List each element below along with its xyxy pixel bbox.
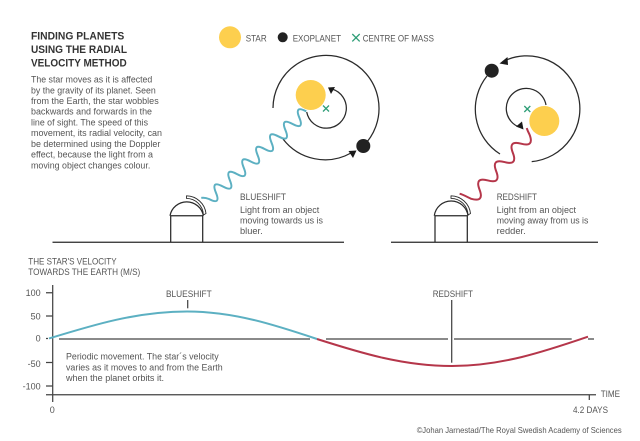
blue light wave — [201, 107, 311, 207]
icon: observatory — [170, 196, 206, 242]
axis title: TOWARDS THE EARTH (M/S) — [28, 267, 140, 277]
redshift caption: Light from an object — [497, 205, 576, 215]
blueshift curve — [49, 312, 317, 339]
legend: STAR — [246, 33, 267, 43]
y axis labels: 100 — [26, 288, 41, 298]
icon: centre of mass — [323, 106, 329, 112]
x axis labels: 0 — [50, 405, 55, 415]
redshift caption: redder. — [497, 226, 526, 236]
axis title — [28, 256, 140, 277]
redshift marker — [433, 289, 473, 363]
title — [31, 30, 127, 69]
redshift caption: moving away from us is — [497, 216, 589, 226]
legend: CENTRE OF MASS — [363, 33, 434, 43]
chart note: Periodic movement. The star´s velocity — [66, 352, 219, 362]
icon: star — [296, 80, 326, 110]
y axis labels: -100 — [23, 382, 41, 392]
outer planet orbit with arrow — [273, 55, 379, 160]
intro text block: movement, its radial velocity, can — [31, 128, 162, 138]
intro text block: by the gravity of its planet. Seen — [31, 85, 156, 95]
intro text block: from the Earth, the star wobbles — [31, 96, 159, 106]
intro text block: backwards and forwards in the — [31, 107, 152, 117]
intro text block: effect, because the light from a — [31, 150, 153, 160]
intro text block: line of sight. The speed of this — [31, 117, 148, 127]
axes — [46, 285, 596, 402]
x axis labels — [50, 389, 620, 415]
outer planet orbit with arrow — [475, 56, 580, 162]
chart note: when the planet orbits it. — [65, 373, 164, 383]
inner star orbit with arrow — [506, 88, 546, 130]
blueshift marker: BLUESHIFT — [166, 289, 212, 299]
icon: exoplanet — [485, 64, 499, 78]
y axis labels: 0 — [36, 334, 41, 344]
chart note — [65, 352, 223, 383]
intro text block: be determined using the Doppler — [31, 139, 160, 149]
blueshift caption: Light from an object — [240, 205, 320, 215]
axis title: THE STAR'S VELOCITY — [28, 256, 117, 266]
blueshift caption: BLUESHIFT — [240, 192, 286, 202]
y axis labels: -50 — [28, 359, 41, 369]
x axis labels: TIME — [601, 389, 620, 399]
intro text block: The star moves as it is affected — [31, 75, 152, 85]
legend: EXOPLANET — [293, 33, 341, 43]
blueshift caption: moving towards us is — [240, 216, 323, 226]
title: USING THE RADIAL — [31, 44, 127, 56]
chart note: varies as it moves to and from the Earth — [66, 362, 223, 372]
redshift caption: REDSHIFT — [497, 192, 537, 202]
panel: velocity chart — [23, 256, 620, 415]
blueshift marker — [166, 289, 212, 308]
icon: star — [529, 106, 559, 136]
ground line — [52, 241, 344, 243]
title: VELOCITY METHOD — [31, 57, 127, 69]
x axis labels: 4.2 DAYS — [573, 405, 608, 415]
redshift caption — [497, 192, 589, 236]
inner star orbit with arrow — [307, 87, 346, 128]
legend — [219, 26, 434, 48]
panel: blueshift diagram — [52, 55, 379, 242]
redshift marker: REDSHIFT — [433, 289, 473, 299]
title: FINDING PLANETS — [31, 30, 125, 42]
credit: ©Johan Jarnestad/The Royal Swedish Academy of Sciences — [417, 425, 622, 435]
icon: centre of mass — [524, 106, 530, 112]
y axis labels: 50 — [31, 312, 41, 322]
ground line — [391, 241, 598, 243]
blueshift caption: bluer. — [240, 226, 263, 236]
red light wave — [460, 124, 536, 206]
intro text block: moving object changes colour. — [31, 160, 150, 170]
panel: redshift diagram — [391, 56, 598, 242]
icon: exoplanet — [356, 139, 370, 153]
y axis labels — [23, 288, 41, 392]
blueshift caption — [240, 192, 323, 236]
icon: observatory — [434, 196, 470, 242]
redshift curve — [317, 337, 588, 366]
intro text block — [31, 75, 162, 170]
